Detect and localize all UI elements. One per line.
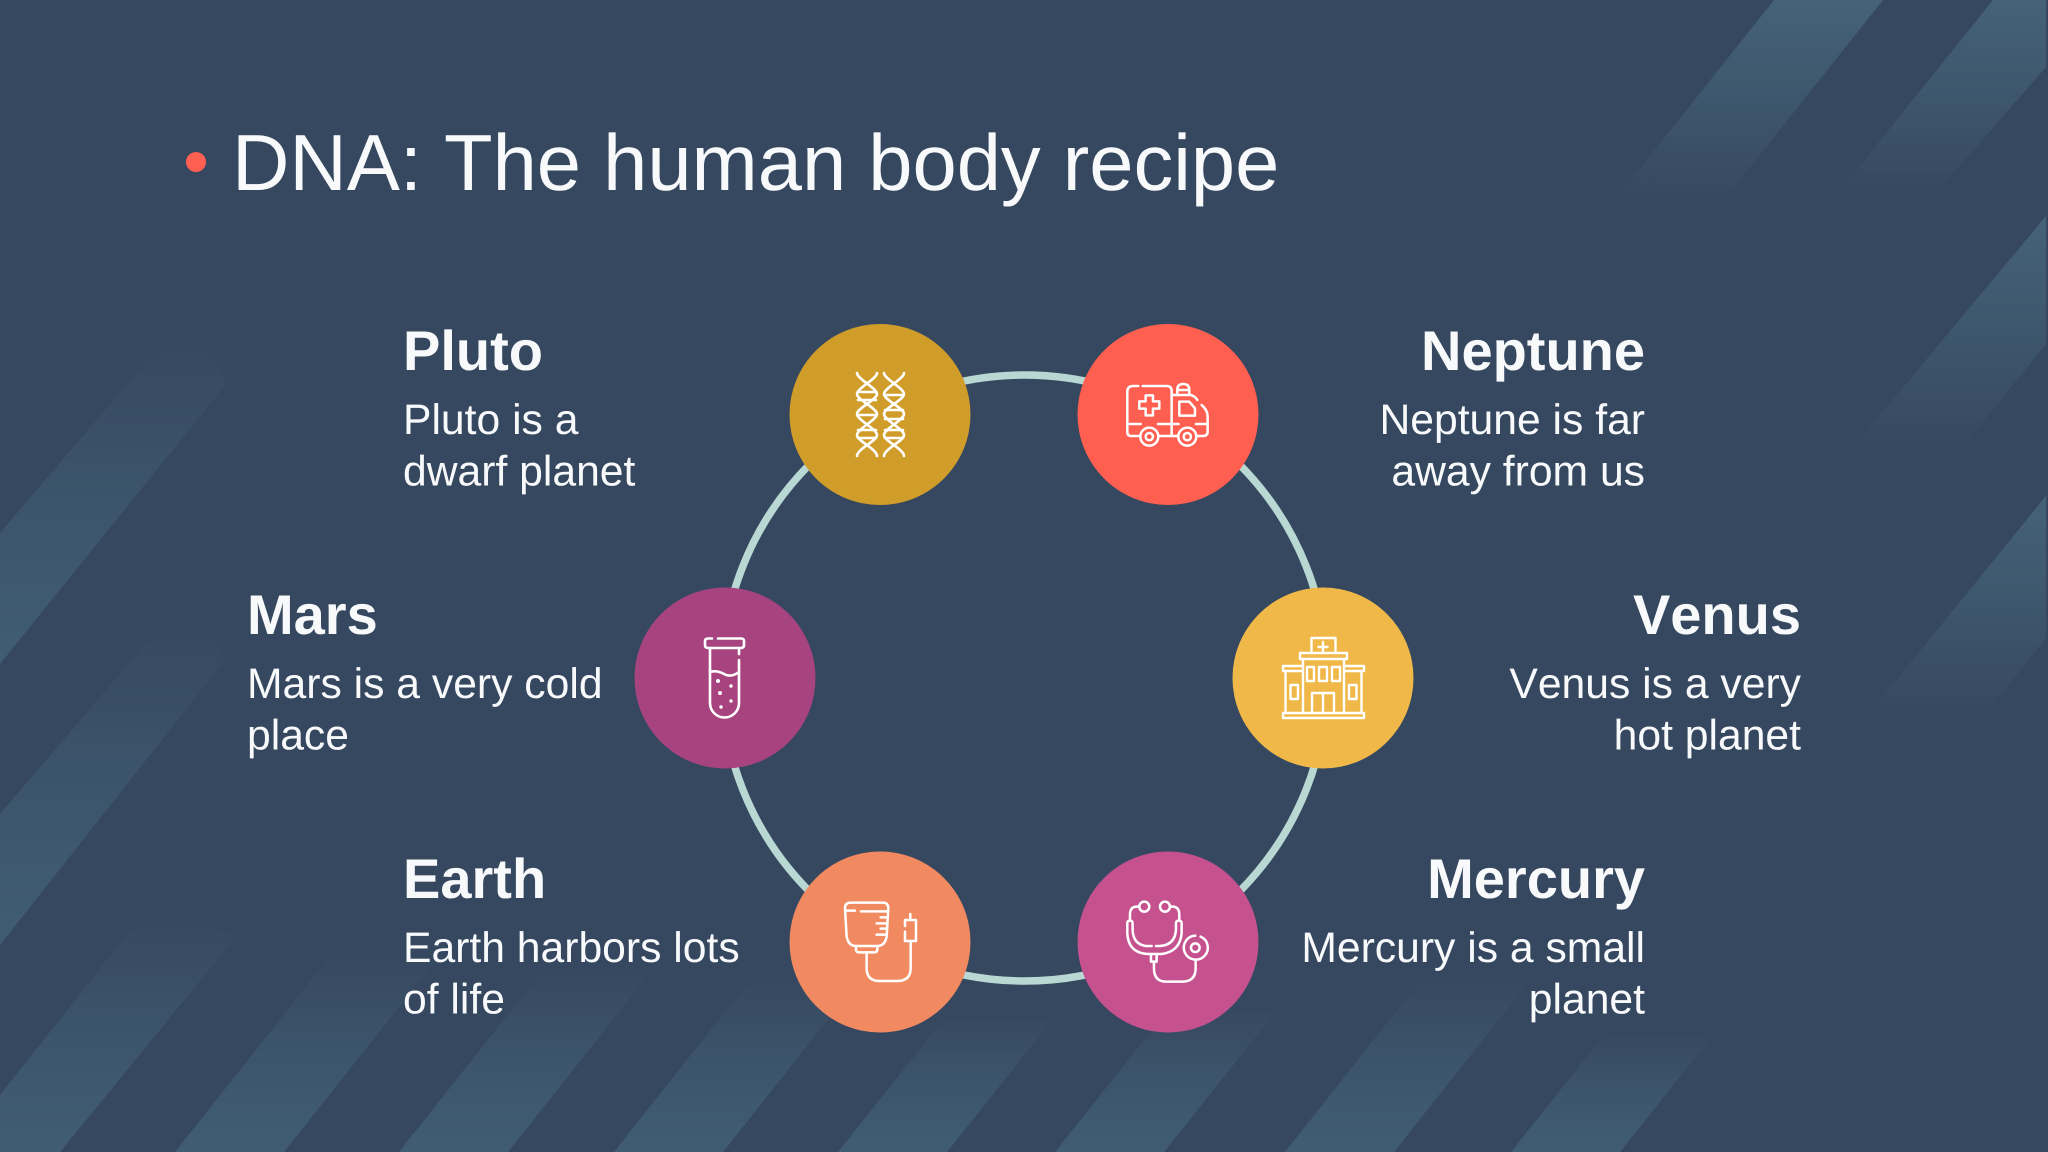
description: Venus: Venus is a very (1509, 660, 1802, 708)
node: Pluto DNA (790, 324, 970, 505)
circle: Earth (790, 852, 970, 1032)
description: Pluto: dwarf planet (403, 448, 636, 496)
text block: Mars (247, 583, 603, 760)
description: Venus: hot planet (1614, 712, 1801, 760)
text block: Neptune (1379, 319, 1645, 496)
circle: Pluto (790, 324, 970, 505)
text block: Mercury (1301, 847, 1645, 1024)
title text: DNA: The human body recipe (232, 118, 1279, 207)
text block: Venus (1509, 583, 1802, 760)
description: Mars: Mars is a very cold (247, 660, 603, 708)
circle: Mars (634, 588, 816, 768)
circle: Venus (1232, 588, 1414, 768)
circle: Neptune (1078, 324, 1258, 505)
description: Pluto: Pluto is a (403, 396, 579, 444)
heading: Mercury: Mercury (1427, 847, 1645, 910)
node: Mars test tube (634, 588, 816, 768)
heading: Venus: Venus (1633, 583, 1801, 646)
heading: Earth: Earth (403, 847, 546, 910)
icon: stethoscope (1127, 902, 1208, 982)
title (186, 118, 1279, 207)
description: Earth: of life (403, 976, 505, 1024)
heading: Neptune: Neptune (1421, 319, 1645, 382)
icon: IV drip (845, 903, 916, 981)
heading: Mars: Mars (247, 583, 378, 646)
icon: DNA helices (857, 373, 904, 456)
heading: Pluto: Pluto (403, 319, 543, 382)
description: Earth: Earth harbors lots (403, 924, 740, 972)
circle: Mercury (1078, 852, 1258, 1032)
node: Mercury stethoscope (1078, 852, 1258, 1032)
icon: hospital (1283, 638, 1364, 718)
node: Neptune ambulance (1078, 324, 1258, 505)
icon: ambulance (1127, 384, 1208, 446)
text block: Pluto (403, 319, 636, 496)
description: Neptune: Neptune is far (1379, 396, 1645, 444)
title bullet (186, 152, 206, 172)
description: Mercury: planet (1529, 976, 1645, 1024)
icon: test tube (705, 638, 744, 718)
connecting ring (722, 375, 1328, 981)
description: Neptune: away from us (1391, 448, 1645, 496)
text block: Earth (403, 847, 740, 1024)
node: Earth IV drip (790, 852, 970, 1032)
description: Mars: place (247, 712, 349, 760)
description: Mercury: Mercury is a small (1301, 924, 1645, 972)
node: Venus hospital (1232, 588, 1414, 768)
